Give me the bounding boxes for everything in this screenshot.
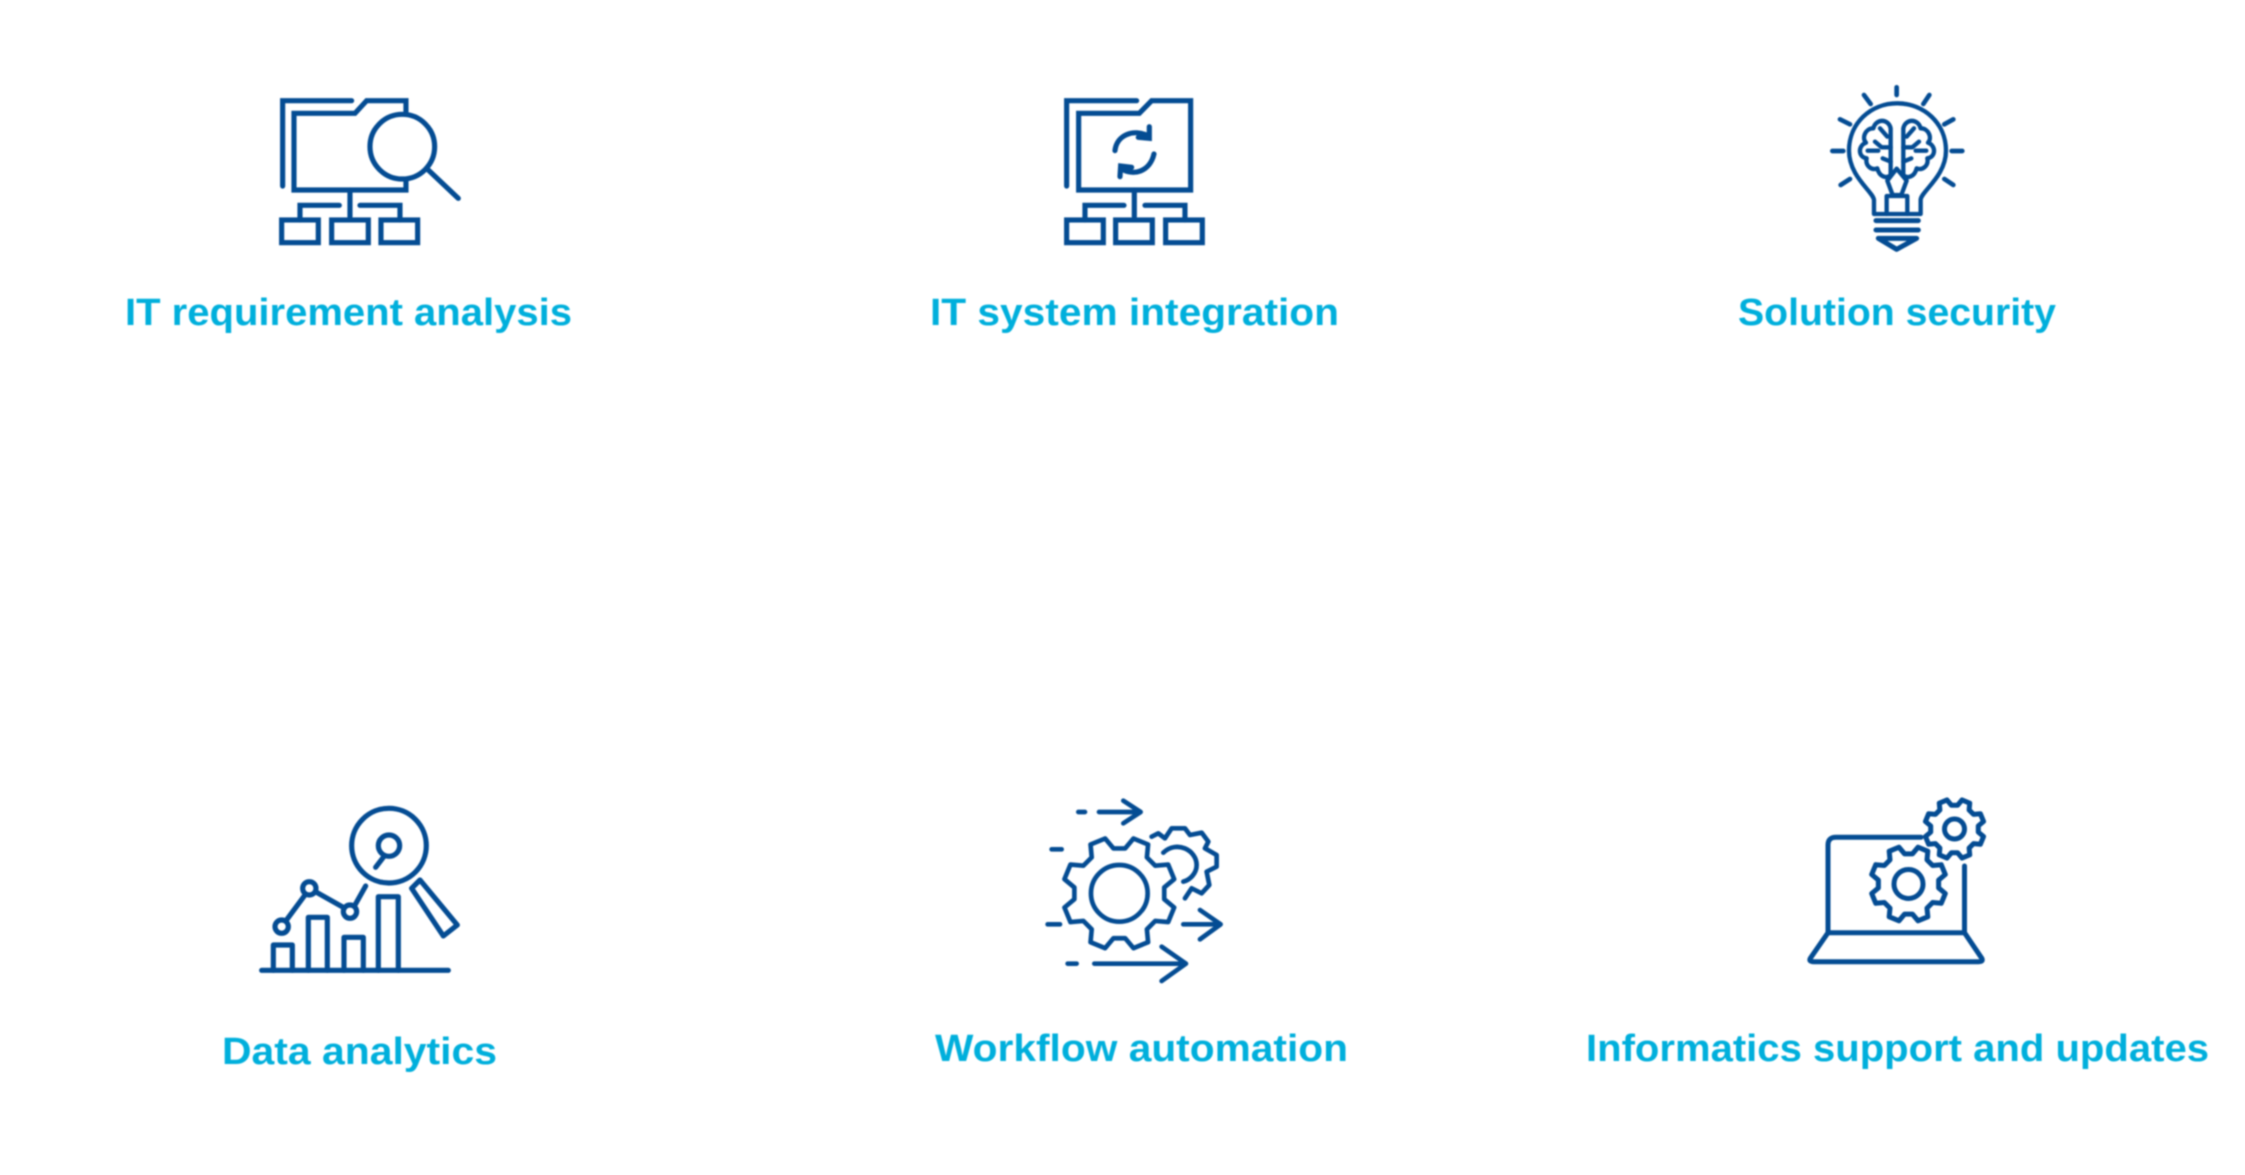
label: IT system integration: IT system integration (930, 292, 1339, 334)
panel: IT system integration (930, 101, 1339, 334)
panel: Informatics support and updates (1586, 800, 2209, 1070)
label: Data analytics: Data analytics (222, 1031, 497, 1073)
panel: IT requirement analysis (125, 101, 572, 334)
label: Informatics support and updates: Informatics support and updates (1586, 1028, 2209, 1070)
icon: laptop with gears (1810, 800, 1984, 962)
panel: Solution security (1738, 87, 2056, 334)
label: IT requirement analysis: IT requirement analysis (125, 292, 572, 334)
icon: folder with magnifier and network (282, 101, 458, 243)
icon: gears with arrows (1048, 801, 1221, 981)
icon: light bulb with brain (1832, 87, 1962, 249)
label: Solution security: Solution security (1738, 292, 2056, 334)
label: Workflow automation: Workflow automation (935, 1028, 1348, 1070)
panel: Workflow automation (935, 801, 1348, 1070)
icon: bar chart with magnifier (262, 808, 457, 970)
icon: folder with sync arrows and network (1067, 101, 1202, 243)
panel: Data analytics (222, 808, 497, 1073)
